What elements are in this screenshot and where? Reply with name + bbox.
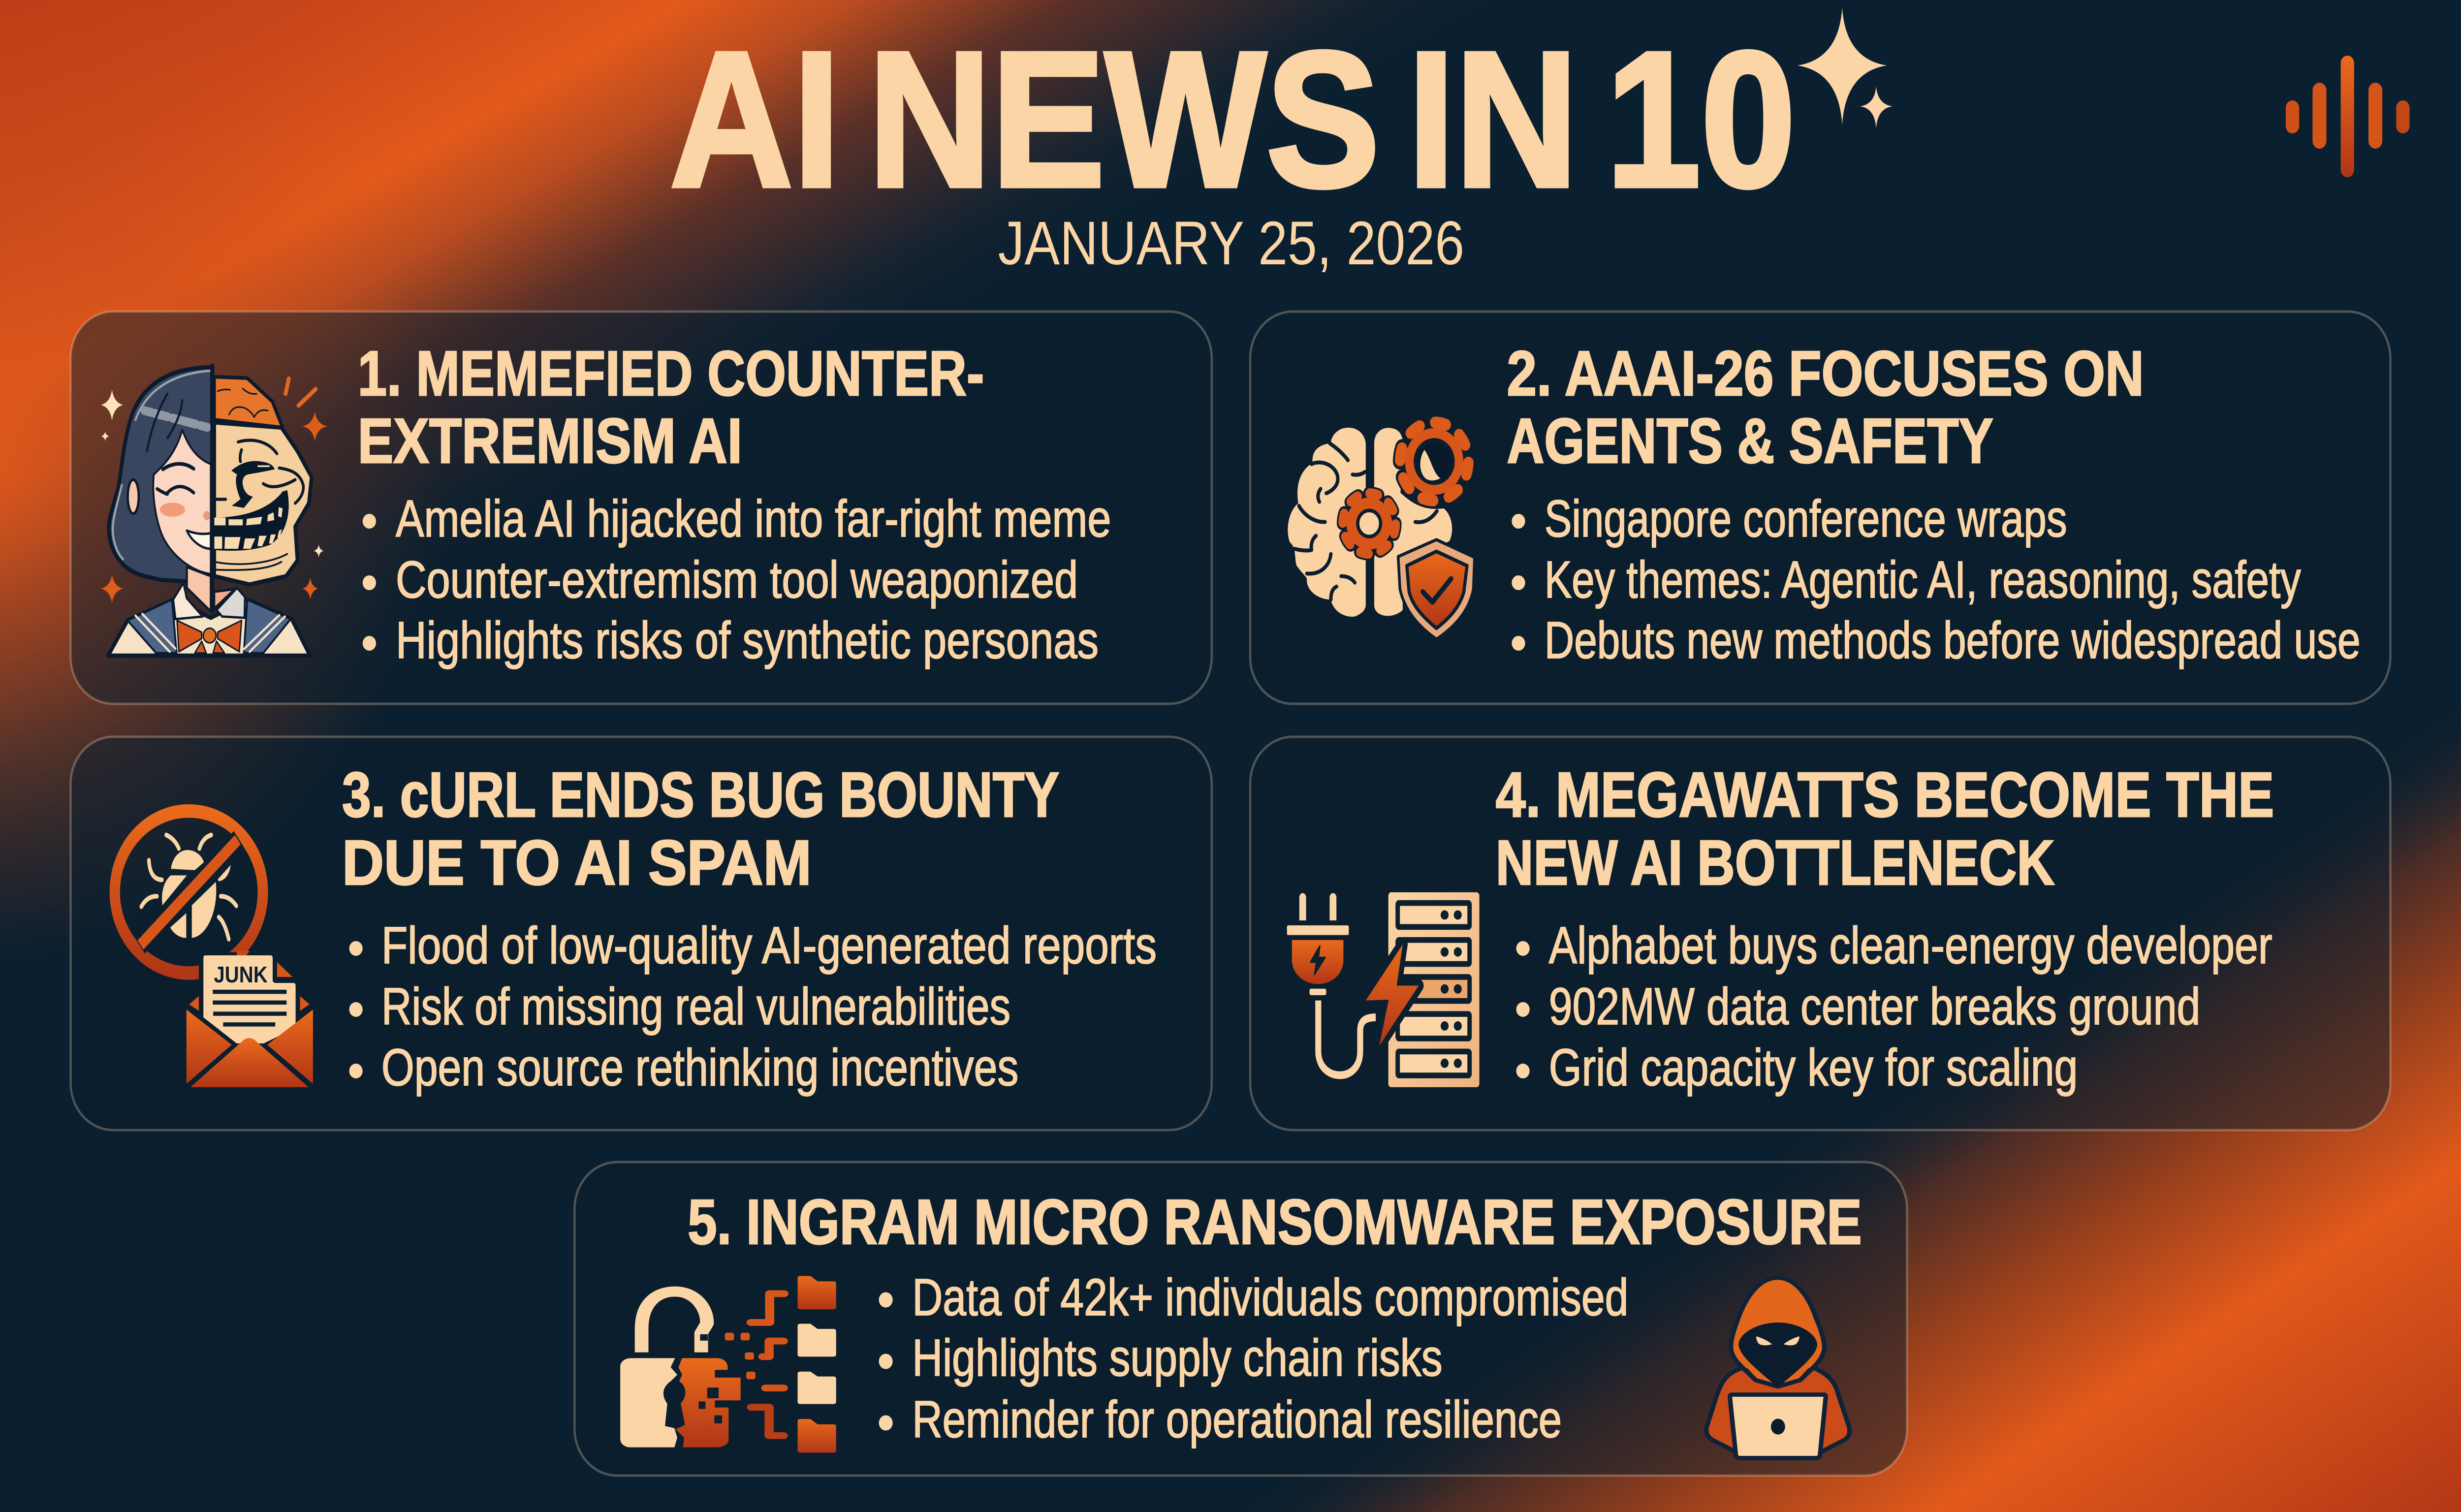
bullet list 2: Key themes: Agentic AI, reasoning, safety (1545, 551, 2301, 609)
bullet list 3: Risk of missing real vulnerabilities (381, 977, 1010, 1036)
heading 4: NEW AI BOTTLENECK (1496, 827, 2054, 898)
heading 4: 4. MEGAWATTS BECOME THE (1496, 759, 2274, 830)
title: AI NEWS IN 10 (670, 12, 1796, 227)
bullet list 5: Data of 42k+ individuals compromised (912, 1268, 1629, 1326)
icon: power plug and server rack with bolt (1287, 892, 1480, 1087)
icon: title sparkles (1798, 8, 1893, 128)
heading 4 (1496, 759, 2274, 898)
icon: half girl half troll face (101, 366, 327, 656)
bullet list 1: Highlights risks of synthetic personas (396, 611, 1099, 669)
panel: memefied counter-extremism AI (71, 312, 1212, 704)
bullet list 3: Open source rethinking incentives (381, 1039, 1018, 1097)
heading 1 (358, 338, 984, 476)
panel: megawatts become the new AI bottleneck (1250, 737, 2390, 1130)
heading 3: 3. cURL ENDS BUG BOUNTY (342, 759, 1059, 830)
heading 2: 2. AAAI-26 FOCUSES ON (1507, 338, 2144, 409)
icon: audio waveform logo (2286, 56, 2410, 177)
heading 5: 5. INGRAM MICRO RANSOMWARE EXPOSURE (688, 1187, 1862, 1258)
heading 2 (1507, 338, 2144, 476)
panel: Ingram Micro ransomware exposure (574, 1162, 1907, 1476)
icon: banned bug and junk mail envelope: JUNK (214, 961, 268, 987)
bullet list 4 (1516, 916, 2272, 1097)
icon: broken padlock leaking folders (620, 1276, 836, 1453)
bullet list 2 (1512, 490, 2361, 669)
bullet list 5: Highlights supply chain risks (912, 1329, 1443, 1387)
bullet list 1: Counter-extremism tool weaponized (396, 551, 1078, 609)
heading 1: EXTREMISM AI (358, 406, 742, 476)
panel card 5 (574, 1162, 1907, 1476)
bullet list 1 (363, 490, 1111, 669)
heading 3: DUE TO AI SPAM (342, 827, 812, 898)
panel card 1 (71, 312, 1212, 704)
panel card 2 (1250, 312, 2390, 704)
bullet list 3: Flood of low-quality AI-generated reports (381, 916, 1157, 975)
bullet list 5 (879, 1268, 1629, 1449)
bullet list 2: Singapore conference wraps (1545, 490, 2067, 548)
icon: hooded hacker with laptop (1706, 1278, 1850, 1458)
bullet list 4: Alphabet buys clean-energy developer (1549, 916, 2272, 975)
heading 3 (342, 759, 1059, 898)
bullet list 4: Grid capacity key for scaling (1549, 1039, 2078, 1097)
heading 1: 1. MEMEFIED COUNTER- (358, 338, 984, 409)
panel: cURL ends bug bounty (71, 737, 1212, 1130)
bullet list 2: Debuts new methods before widespread use (1545, 611, 2361, 669)
date: JANUARY 25, 2026 (998, 209, 1464, 278)
bullet list 3 (349, 916, 1157, 1097)
bullet list 5: Reminder for operational resilience (912, 1390, 1562, 1449)
panel: AAAI-26 focuses on agents and safety (1250, 312, 2390, 704)
bullet list 1: Amelia AI hijacked into far-right meme (396, 490, 1111, 548)
icon: banned bug and junk mail envelope (115, 811, 313, 1087)
panel card 4 (1250, 737, 2390, 1130)
panel card 3 (71, 737, 1212, 1130)
bullet list 4: 902MW data center breaks ground (1549, 977, 2200, 1036)
icon: brain with gears and shield (1288, 422, 1475, 639)
heading 2: AGENTS & SAFETY (1507, 406, 1993, 476)
